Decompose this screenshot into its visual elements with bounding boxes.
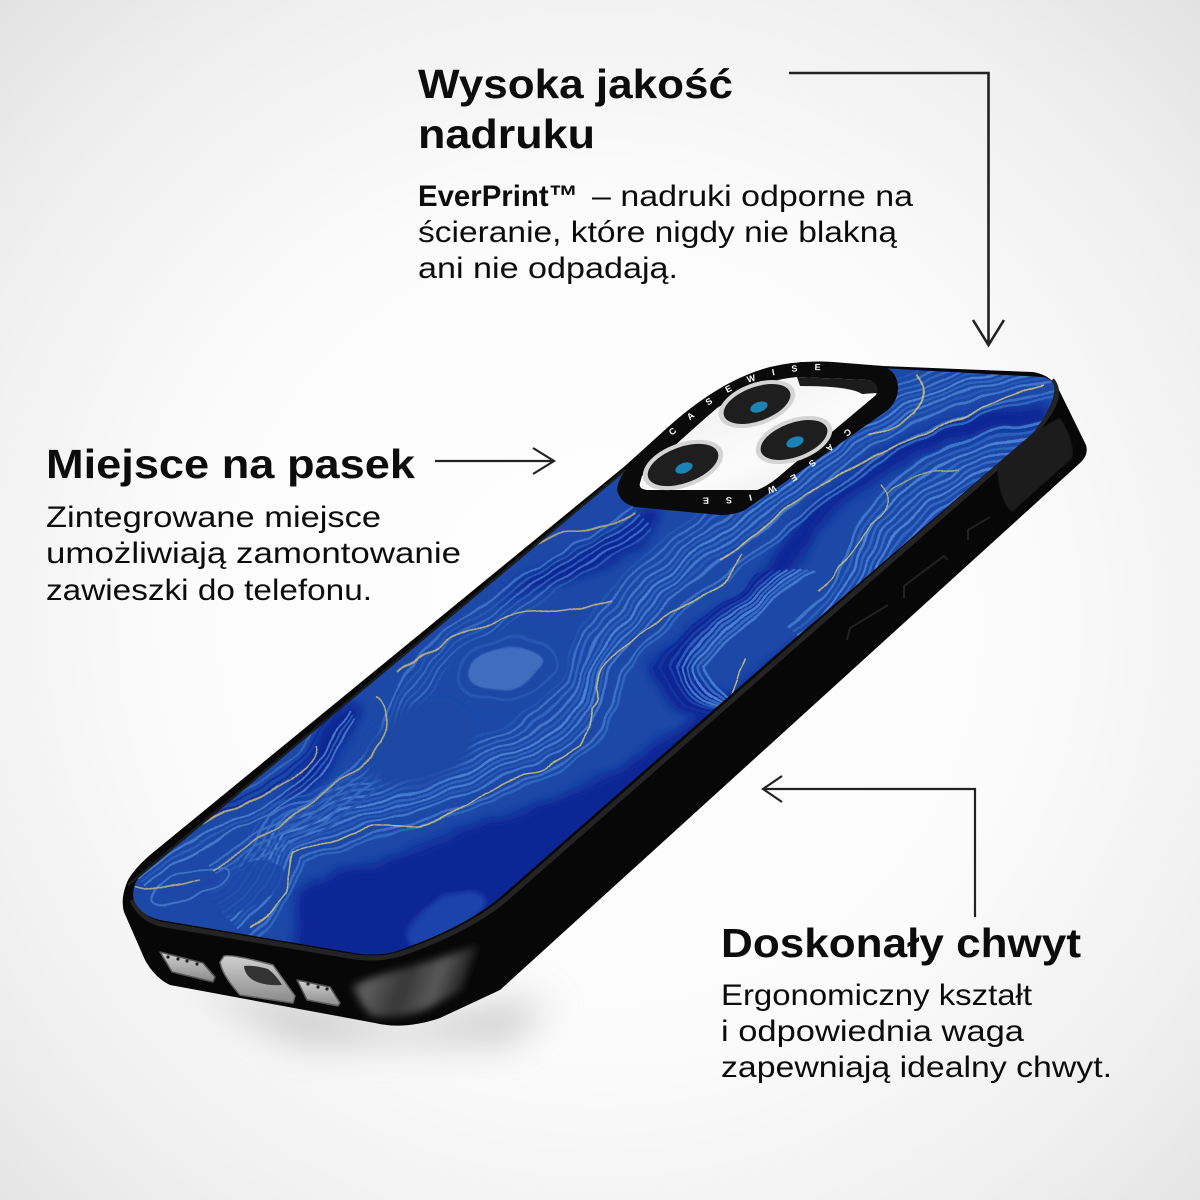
light bundle main xyxy=(205,343,1066,943)
body line two: ścieranie, które nigdy nie blakną xyxy=(418,216,897,249)
side tab xyxy=(997,418,1072,512)
body line three: ani nie odpadają. xyxy=(418,252,678,285)
callout: grip xyxy=(721,920,1112,1084)
brand term: EverPrint™ xyxy=(418,180,578,213)
heading line two: nadruku xyxy=(418,111,595,157)
bundle navy swirl rings xyxy=(655,571,812,715)
body line one: Ergonomiczny kształt xyxy=(721,979,1033,1012)
body line two: umożliwiają zamontowanie xyxy=(46,537,461,570)
lens left xyxy=(636,430,730,500)
phone case xyxy=(122,362,1087,1026)
body line three: zawieszki do telefonu. xyxy=(46,574,372,607)
camera frame xyxy=(617,362,898,515)
top left case edge xyxy=(128,470,625,885)
marble back panel xyxy=(133,368,1054,954)
gold veins xyxy=(135,372,1045,927)
body line one: – nadruki odporne na xyxy=(592,180,913,213)
case rim xyxy=(132,380,1057,958)
camera island xyxy=(617,362,898,515)
right speaker xyxy=(297,980,340,1006)
heading: Doskonały chwyt xyxy=(721,920,1081,966)
body line two: i odpowiednia waga xyxy=(721,1015,1024,1048)
light bundle right lobe xyxy=(787,420,1042,636)
arrow: strap slot xyxy=(435,448,554,474)
left speaker xyxy=(160,952,215,982)
brand text bottom: CASEWISE xyxy=(703,429,851,504)
bundle left streaks xyxy=(138,707,356,886)
case body xyxy=(123,362,1087,1026)
brand text top: CASEWISE xyxy=(669,364,820,434)
callout: print quality xyxy=(418,61,913,285)
lens right xyxy=(749,407,839,473)
marble rings xyxy=(146,616,577,955)
glossy corner xyxy=(352,945,478,1017)
heading: Wysoka jakość xyxy=(418,61,733,107)
arrow: print quality xyxy=(789,73,1004,345)
heading: Miejsce na pasek xyxy=(46,441,415,487)
body line one: Zintegrowane miejsce xyxy=(46,501,381,534)
charging port and speakers xyxy=(160,952,340,1006)
phone shadow xyxy=(190,985,550,1040)
arrow: grip xyxy=(763,776,975,917)
usb port xyxy=(220,956,295,1003)
light bundle upper left xyxy=(207,507,652,885)
camera window xyxy=(640,377,877,490)
window inner shadow xyxy=(797,377,878,394)
dark marble bands xyxy=(280,405,1050,965)
side buttons xyxy=(847,517,990,640)
lens top xyxy=(712,371,802,437)
callout: strap slot xyxy=(46,441,461,607)
body line three: zapewniają idealny chwyt. xyxy=(721,1051,1112,1084)
